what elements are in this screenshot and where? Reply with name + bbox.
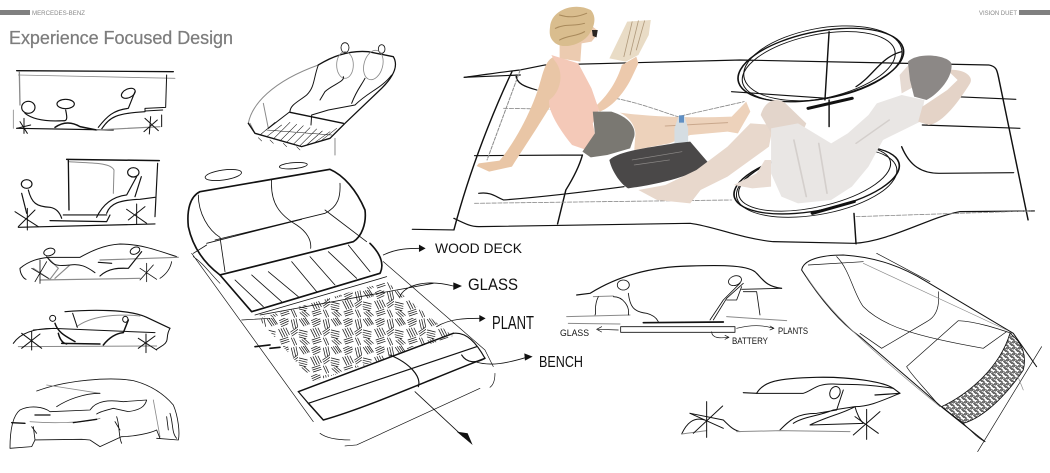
callout arrows (597, 326, 774, 339)
pink top (549, 55, 599, 150)
sketch: perspective seat overview (248, 43, 396, 155)
sketch: section with battery and plants (567, 266, 787, 339)
photo figure: woman reading with book (477, 7, 750, 188)
arrow: plant (437, 315, 486, 327)
sketch: coupe side view with raised canopy (13, 310, 170, 353)
supporting arm (477, 57, 564, 172)
battery pack (621, 327, 735, 332)
arm behind head (918, 70, 971, 125)
label: glass: GLASS (560, 328, 589, 338)
bag (609, 142, 709, 188)
label: plant: PLANT (492, 313, 534, 333)
arrow: wood deck (383, 245, 426, 255)
sketch: low coupe side view with reclined seats (20, 244, 178, 283)
wood deck (193, 243, 387, 315)
sketch: three-quarter car exterior (10, 379, 179, 448)
head and neck (560, 23, 597, 62)
sketch: bench concept top view (188, 161, 533, 446)
planted rear crescent (942, 333, 1024, 423)
label: glass: GLASS (468, 275, 518, 294)
raised thigh (761, 100, 806, 137)
grey shorts (582, 112, 635, 157)
sunglasses (592, 30, 598, 37)
body frame lines (192, 253, 495, 446)
label: bench: BENCH (539, 354, 583, 371)
sketch: three-quarter overview with planted rear (802, 253, 1042, 452)
header left: brand bar and label (0, 10, 85, 17)
cabin and seat lines (198, 161, 367, 272)
label: battery: BATTERY (732, 336, 768, 346)
arrow: forward direction (415, 392, 473, 445)
arrow: glass (260, 282, 462, 315)
front leg and foot (638, 123, 773, 203)
water bottle (674, 115, 688, 143)
title: Experience Focused Design (9, 28, 233, 48)
header left: brand bar and label: MERCEDES-BENZ (32, 11, 85, 17)
white dress (771, 95, 924, 203)
face (900, 63, 914, 93)
plant and glass area (258, 282, 453, 382)
legs (620, 102, 750, 150)
lower leg behind (734, 160, 771, 188)
book (609, 20, 651, 62)
label: plants: PLANTS (778, 326, 808, 336)
label: wood deck: WOOD DECK (435, 240, 523, 256)
hair (550, 7, 594, 46)
dark hair (908, 55, 952, 100)
top seat loop (728, 14, 914, 127)
bench (255, 333, 485, 420)
photo figure: faded woman reclining (638, 55, 971, 203)
sketch: main car outline behind figures (412, 14, 1034, 244)
arrow: bench (475, 353, 533, 364)
cabin outline (188, 169, 365, 275)
sketch: low side view with large wheels (682, 377, 900, 439)
sketch: side view with three seats (13, 71, 175, 134)
forearm (595, 57, 638, 112)
header right: project label and bar: VISION DUET (979, 11, 1017, 17)
header right: project label and bar (979, 10, 1050, 17)
bottom seat loop (725, 133, 908, 229)
sketch: side view with tall cabin (15, 159, 159, 230)
